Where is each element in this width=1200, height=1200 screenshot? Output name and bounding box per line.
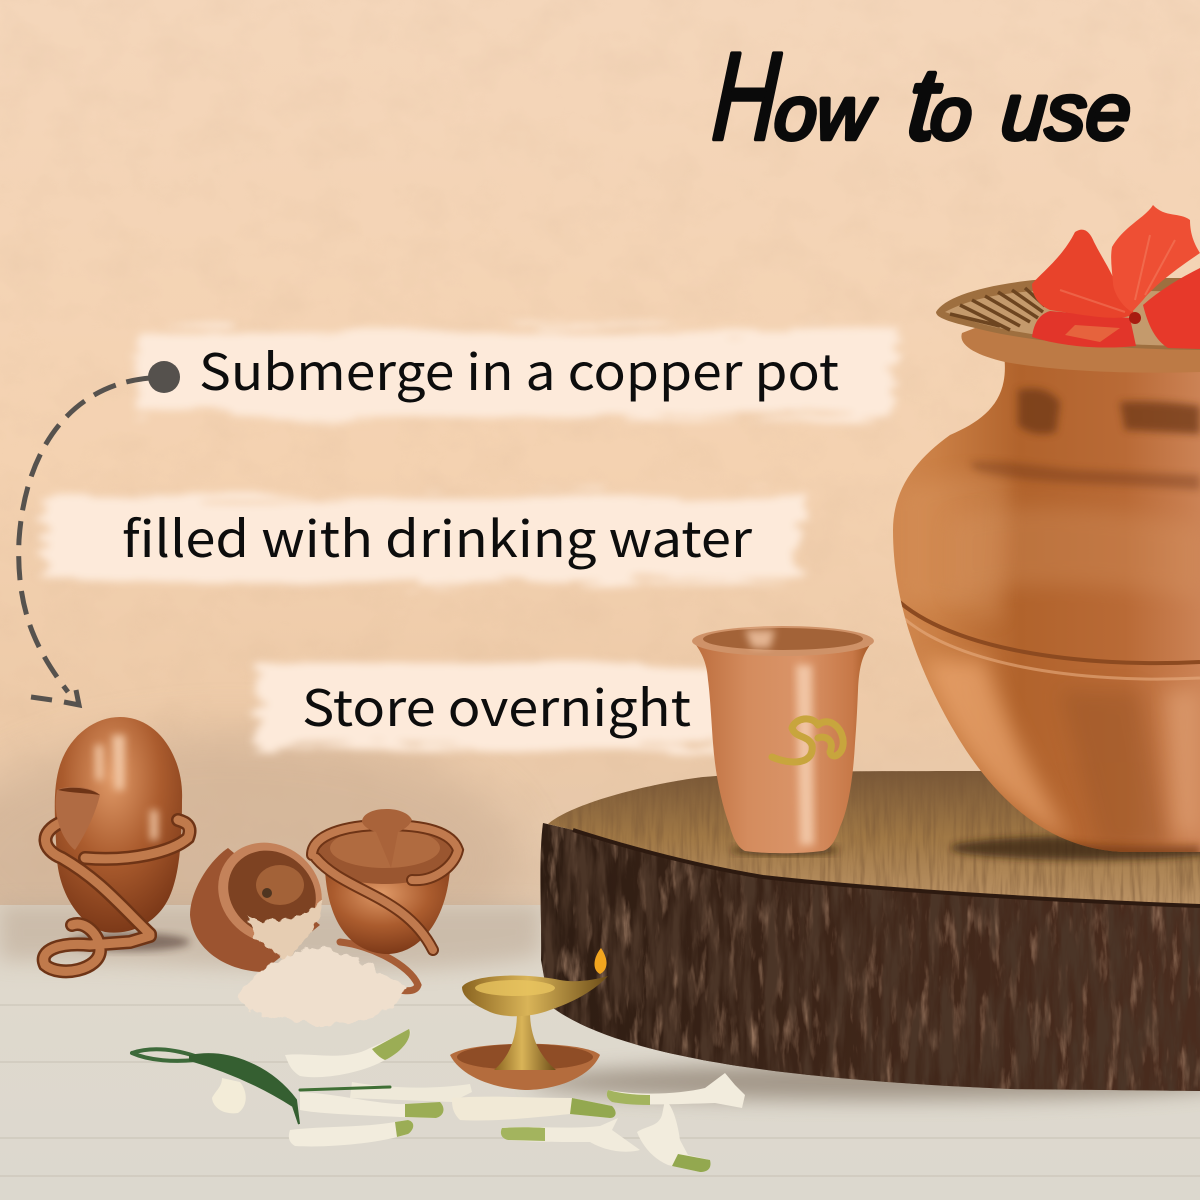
back flower (350, 1082, 472, 1102)
title: o (928, 72, 975, 155)
tabletop (0, 905, 1200, 1200)
spilled rice (235, 948, 405, 1025)
snake hood on pot (362, 809, 412, 868)
slab shadow (530, 1064, 1200, 1100)
lamp bowl (462, 976, 608, 1016)
pot neck collar (961, 328, 1200, 373)
title (709, 27, 1135, 165)
flower one (285, 1030, 410, 1077)
copper tumbler (692, 626, 874, 855)
lidded pot body (325, 870, 450, 954)
tumbler shadow (730, 845, 840, 855)
lidded pot foot coil (340, 942, 418, 991)
step 3 text: Store overnight (302, 669, 691, 741)
flower four (289, 1120, 413, 1146)
copper lidded pot (311, 809, 459, 991)
rice in bowl (248, 900, 322, 958)
copper tipped bowl (190, 822, 342, 972)
hibiscus flower (1032, 205, 1200, 349)
large copper pot (885, 205, 1200, 860)
title: use (999, 66, 1134, 156)
flower seven (637, 1100, 711, 1172)
flower bud (212, 1078, 246, 1113)
snake coil (44, 820, 190, 971)
copper figure with snake (44, 717, 190, 971)
brass lamp (450, 948, 608, 1090)
lidded pot lid (311, 820, 459, 884)
flower three (452, 1097, 616, 1121)
pot shadow (950, 836, 1200, 860)
wood slab (530, 765, 1200, 1100)
slab bark side (540, 823, 1200, 1091)
title: t (904, 47, 944, 161)
egg shadow (70, 933, 190, 951)
lamp saucer (450, 1044, 600, 1090)
dashed arrow (19, 361, 180, 705)
snake coil on pot (312, 825, 458, 950)
tumbler body (696, 645, 870, 853)
scattered tuberose flowers and leaves (132, 1029, 745, 1172)
step 1 text: Submerge in a copper pot (199, 333, 839, 405)
flower six (607, 1073, 745, 1108)
title: ow (772, 71, 880, 156)
flower two (300, 1092, 443, 1118)
leaf sprig (132, 1049, 390, 1124)
snake hood (56, 787, 100, 850)
tumbler highlight (796, 665, 814, 845)
om symbol (772, 719, 843, 762)
tumbler rim (692, 626, 874, 656)
title: H (709, 27, 784, 165)
flame (594, 948, 607, 974)
lamp stem (494, 1012, 556, 1070)
pot body (885, 350, 1200, 860)
slab top (540, 765, 1200, 910)
pot rim plate (936, 278, 1200, 350)
brush strip: step 1 (138, 330, 894, 416)
plate ribs (950, 288, 1045, 330)
step 2 text: filled with drinking water (122, 500, 753, 572)
brush strip: step 2 (44, 496, 800, 582)
egg body (55, 717, 182, 933)
flower five (501, 1118, 640, 1152)
brush strip: step 3 (258, 663, 730, 749)
